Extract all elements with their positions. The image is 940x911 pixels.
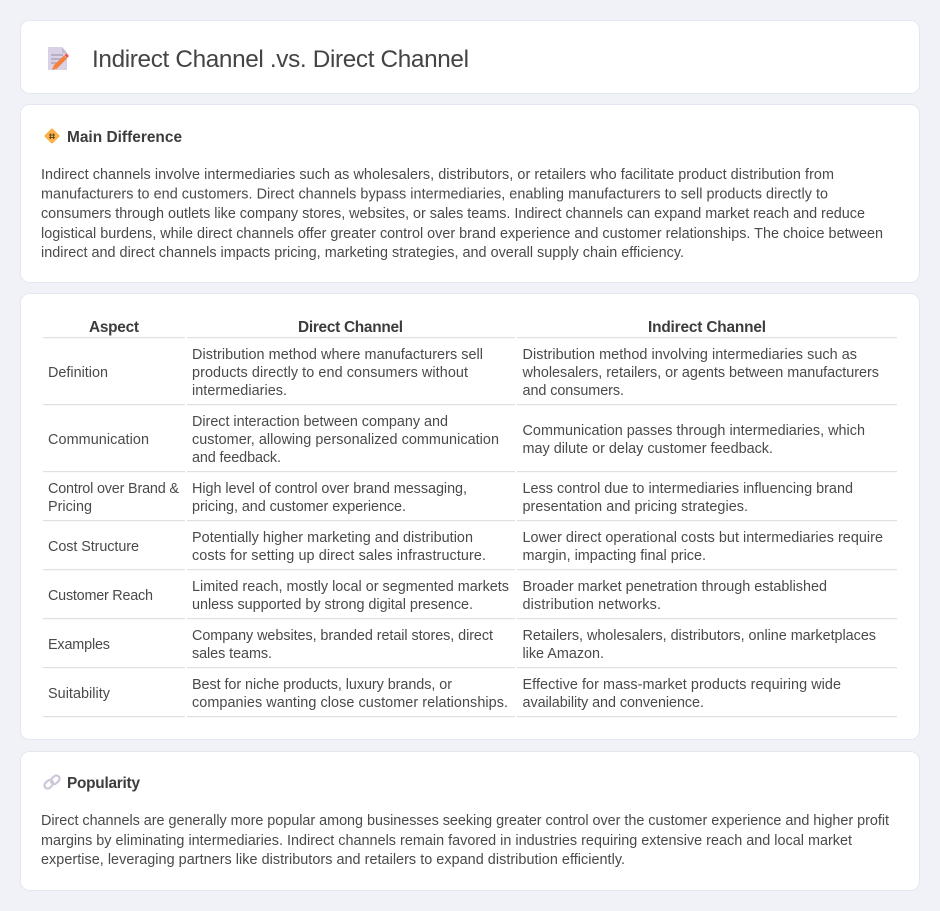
row: suitability: Best for niche products, luxury brands, or (192, 677, 452, 693)
title: Indirect Channel .vs. Direct Channel (92, 46, 469, 73)
row: customer reach: Limited reach, mostly local or segmented markets (192, 579, 509, 595)
text: popularity paragraph: Direct channels are generally more popular among businesses seeking greater control over the customer experience and higher profit (41, 813, 889, 829)
row: suitability: companies wanting close customer relationships. (192, 695, 508, 711)
row: definition: Distribution method involving intermediaries such as (522, 347, 857, 363)
row: control over brand and pricing: Control over Brand & (48, 481, 179, 497)
text: main difference paragraph: consumers through outlets like company stores, websites, or sales teams. Indirect channels can expand market reach and reduce (41, 206, 865, 222)
row: control over brand and pricing: Pricing (48, 499, 92, 515)
row: control over brand and pricing: presentation and pricing strategies. (522, 499, 748, 515)
row: examples: Company websites, branded retail stores, direct (192, 628, 493, 644)
row: customer reach (43, 579, 897, 619)
heading: popularity: Popularity (67, 775, 140, 792)
row: suitability (43, 677, 897, 717)
row: definition: Distribution method where manufacturers sell (192, 347, 483, 363)
icon: document with pencil (48, 47, 69, 70)
text: main difference paragraph: indirect and direct channels impacts pricing, marketing strategies, and overall supply chain efficiency. (41, 245, 684, 261)
row: communication: Direct interaction between company and (192, 414, 448, 430)
row: suitability: Effective for mass-market products requiring wide (522, 677, 841, 693)
table header row: Direct Channel (298, 319, 403, 336)
row: cost structure: Lower direct operational costs but intermediaries require (522, 530, 883, 546)
row: customer reach: Broader market penetration through established (522, 579, 827, 595)
row: control over brand and pricing (43, 481, 897, 521)
row: control over brand and pricing: pricing, and customer experience. (192, 499, 406, 515)
row: cost structure: costs for setting up direct sales infrastructure. (192, 548, 486, 564)
row: definition: products directly to end consumers without (192, 365, 468, 381)
text: main difference paragraph: logistical burdens, while direct channels offer greater control over brand experience and customer relationships. The choice between (41, 226, 883, 242)
row: cost structure: margin, impacting final price. (522, 548, 706, 564)
panel: main difference (20, 104, 920, 282)
row: communication (43, 414, 897, 472)
text: main difference paragraph: manufacturers to end customers. Direct channels bypass intermediaries, enabling manufacturers to sell products directly to (41, 186, 828, 202)
row: definition: Definition (48, 365, 108, 381)
table header row: Indirect Channel (648, 319, 766, 336)
row: control over brand and pricing: Less control due to intermediaries influencing brand (522, 481, 853, 497)
row: cost structure: Cost Structure (48, 539, 139, 555)
row: examples: Retailers, wholesalers, distributors, online marketplaces (522, 628, 876, 644)
row: communication: may dilute or delay customer feedback. (522, 441, 773, 457)
panel: title header (20, 20, 920, 94)
text: popularity paragraph: expertise, leveraging partners like distributors and retailers to expand distribution efficiently. (41, 852, 625, 868)
row: cost structure: Potentially higher marketing and distribution (192, 530, 473, 546)
row: examples: sales teams. (192, 646, 272, 662)
row: customer reach: distribution networks. (522, 597, 661, 613)
row: definition (43, 347, 897, 405)
row: control over brand and pricing: High level of control over brand messaging, (192, 481, 467, 497)
text: popularity paragraph: margins by eliminating intermediaries. Indirect channels remain favored in industries requiring extensive reach and local market (41, 833, 852, 849)
row: examples: like Amazon. (522, 646, 604, 662)
text: main difference paragraph (41, 167, 883, 261)
text: main difference paragraph: Indirect channels involve intermediaries such as wholesalers, distributors, or retailers who facilitate product distribution from (41, 167, 834, 183)
row: cost structure (43, 530, 897, 570)
row: customer reach: Customer Reach (48, 588, 153, 604)
icon: orange diamond (44, 128, 60, 144)
row: definition: intermediaries. (192, 383, 287, 399)
row: communication: and feedback. (192, 450, 281, 466)
table header row (43, 319, 897, 338)
heading: main difference: Main Difference (67, 129, 182, 146)
row: examples (43, 628, 897, 668)
row: communication: Communication (48, 432, 149, 448)
table header row: Aspect (89, 319, 139, 336)
row: customer reach: unless supported by strong digital presence. (192, 597, 473, 613)
row: suitability: availability and convenience. (522, 695, 704, 711)
icon: chain link (43, 774, 61, 790)
row: communication: customer, allowing personalized communication (192, 432, 499, 448)
row: examples: Examples (48, 637, 110, 653)
row: communication: Communication passes through intermediaries, which (522, 423, 865, 439)
row: definition: and consumers. (522, 383, 624, 399)
row: definition: wholesalers, retailers, or agents between manufacturers (522, 365, 879, 381)
panel: comparison table (20, 294, 920, 740)
panel: popularity (20, 752, 920, 890)
row: suitability: Suitability (48, 686, 111, 702)
text: popularity paragraph (41, 813, 889, 868)
